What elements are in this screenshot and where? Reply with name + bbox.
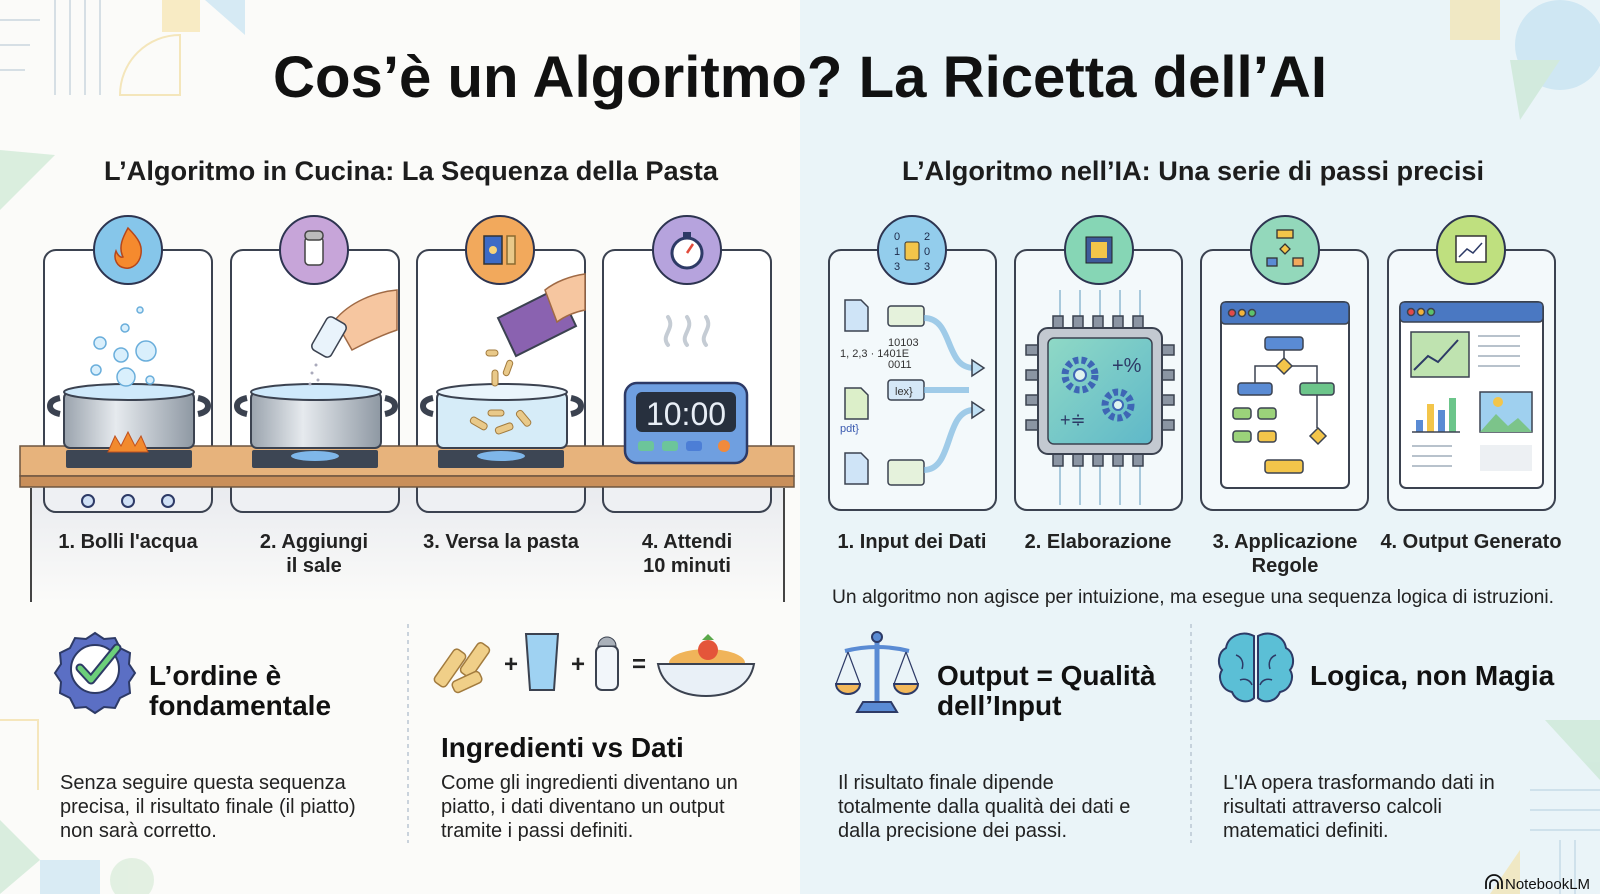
text: AI subtitle: Un algoritmo non agisce per intuizione, ma esegue una sequenza logica di istruzioni. <box>832 587 1554 608</box>
step 1: data input <box>845 300 984 485</box>
labels: AI steps: 3. Applicazione <box>1213 531 1357 553</box>
panel: ingredients vs data: Ingredienti vs Dati <box>441 732 684 763</box>
labels: kitchen steps: 2. Aggiungi <box>260 531 368 553</box>
panel: AI sequence: 3 <box>894 261 900 273</box>
step 4: wait timer <box>625 317 747 463</box>
panel: AI sequence: 0 <box>894 231 900 243</box>
panel: order is fundamental: non sarà corretto. <box>60 820 217 842</box>
panel: output = input quality <box>836 632 1156 842</box>
panel: ingredients vs data <box>433 634 754 842</box>
icon: scale <box>836 632 918 712</box>
step 2: processing chip: +≑ <box>1060 410 1086 430</box>
panel: AI sequence: 2 <box>924 231 930 243</box>
icons: AI step circles <box>878 216 1505 284</box>
step 2: processing chip <box>1026 290 1174 505</box>
panel: output = input quality: Il risultato finale dipende <box>838 772 1054 794</box>
panel: order is fundamental: L’ordine è <box>149 660 281 691</box>
icon: brain <box>1219 634 1293 701</box>
panel: logic not magic: Logica, non Magia <box>1310 660 1555 691</box>
heading: right section: L’Algoritmo nell’IA: Una serie di passi precisi <box>902 156 1484 186</box>
labels: kitchen steps: il sale <box>286 555 342 577</box>
panel: order is fundamental: Senza seguire questa sequenza <box>60 772 347 794</box>
panel: AI sequence: 0011 <box>888 359 912 371</box>
panel: AI sequence: 1, 2,3 · 1401E <box>840 348 909 360</box>
icon: ingredients equation <box>433 634 754 696</box>
counter <box>20 446 794 512</box>
panel: output = input quality: Output = Qualità <box>937 660 1156 691</box>
step 3: rules flowchart <box>1221 302 1349 488</box>
heading: left section: L’Algoritmo in Cucina: La Sequenza della Pasta <box>104 156 719 186</box>
labels: AI steps: Regole <box>1252 555 1318 577</box>
labels: kitchen steps: 1. Bolli l'acqua <box>58 531 198 553</box>
panel: AI sequence: 0 <box>924 246 930 258</box>
icon: ingredients equation: + <box>571 651 585 678</box>
icon: ingredients equation: = <box>632 651 646 678</box>
panel: logic not magic: L'IA opera trasformando dati in <box>1223 772 1495 794</box>
panel: kitchen sequence <box>20 216 794 602</box>
panel: order is fundamental <box>55 633 356 842</box>
dividers <box>408 624 1191 843</box>
labels: AI steps: 4. Output Generato <box>1380 531 1562 553</box>
labels: AI steps: 2. Elaborazione <box>1025 531 1171 553</box>
step 4: wait timer: 10:00 <box>646 396 726 432</box>
panel: AI sequence: pdt} <box>840 423 859 435</box>
panel: ingredients vs data: Come gli ingredienti diventano un <box>441 772 738 794</box>
panel: output = input quality: dell’Input <box>937 690 1061 721</box>
panel: AI sequence <box>829 216 1562 608</box>
step 2: add salt <box>237 290 397 468</box>
panel: AI sequence: 10103 <box>888 337 919 349</box>
panel: logic not magic: risultati attraverso calcoli <box>1223 796 1442 818</box>
labels: kitchen steps: 4. Attendi <box>642 531 732 553</box>
background right half <box>800 0 1600 894</box>
panel: logic not magic: matematici definiti. <box>1223 820 1389 842</box>
step 2: processing chip: +% <box>1112 355 1142 377</box>
labels: kitchen steps: 10 minuti <box>643 555 731 577</box>
panel: order is fundamental: fondamentale <box>149 690 331 721</box>
step 4: generated output <box>1400 302 1543 488</box>
labels: kitchen steps: 3. Versa la pasta <box>423 531 580 553</box>
icon: ingredients equation: + <box>504 651 518 678</box>
panel: AI sequence: lex} <box>895 386 913 398</box>
icon: check badge <box>55 633 135 713</box>
labels: AI steps: 1. Input dei Dati <box>838 531 986 553</box>
logo: NotebookLM: NotebookLM <box>1505 876 1590 893</box>
icons: step circles <box>94 216 721 284</box>
step 1: boil water <box>50 307 208 468</box>
panel: logic not magic <box>1219 634 1555 842</box>
panel: ingredients vs data: piatto, i dati diventano un output <box>441 796 725 818</box>
panel: order is fundamental: precisa, il risultato finale (il piatto) <box>60 796 356 818</box>
panel: ingredients vs data: tramite i passi definiti. <box>441 820 633 842</box>
panel: output = input quality: totalmente dalla qualità dei dati e <box>838 796 1130 818</box>
labels: AI steps <box>838 531 1562 577</box>
labels: kitchen steps <box>58 531 732 577</box>
title: Cos’è un Algoritmo? La Ricetta dell’AI <box>273 45 1327 110</box>
panel: AI sequence: 1 <box>894 246 900 258</box>
step 3: pour pasta <box>423 274 585 468</box>
panel: output = input quality: dalla precisione dei passi. <box>838 820 1067 842</box>
panel: AI sequence: 3 <box>924 261 930 273</box>
